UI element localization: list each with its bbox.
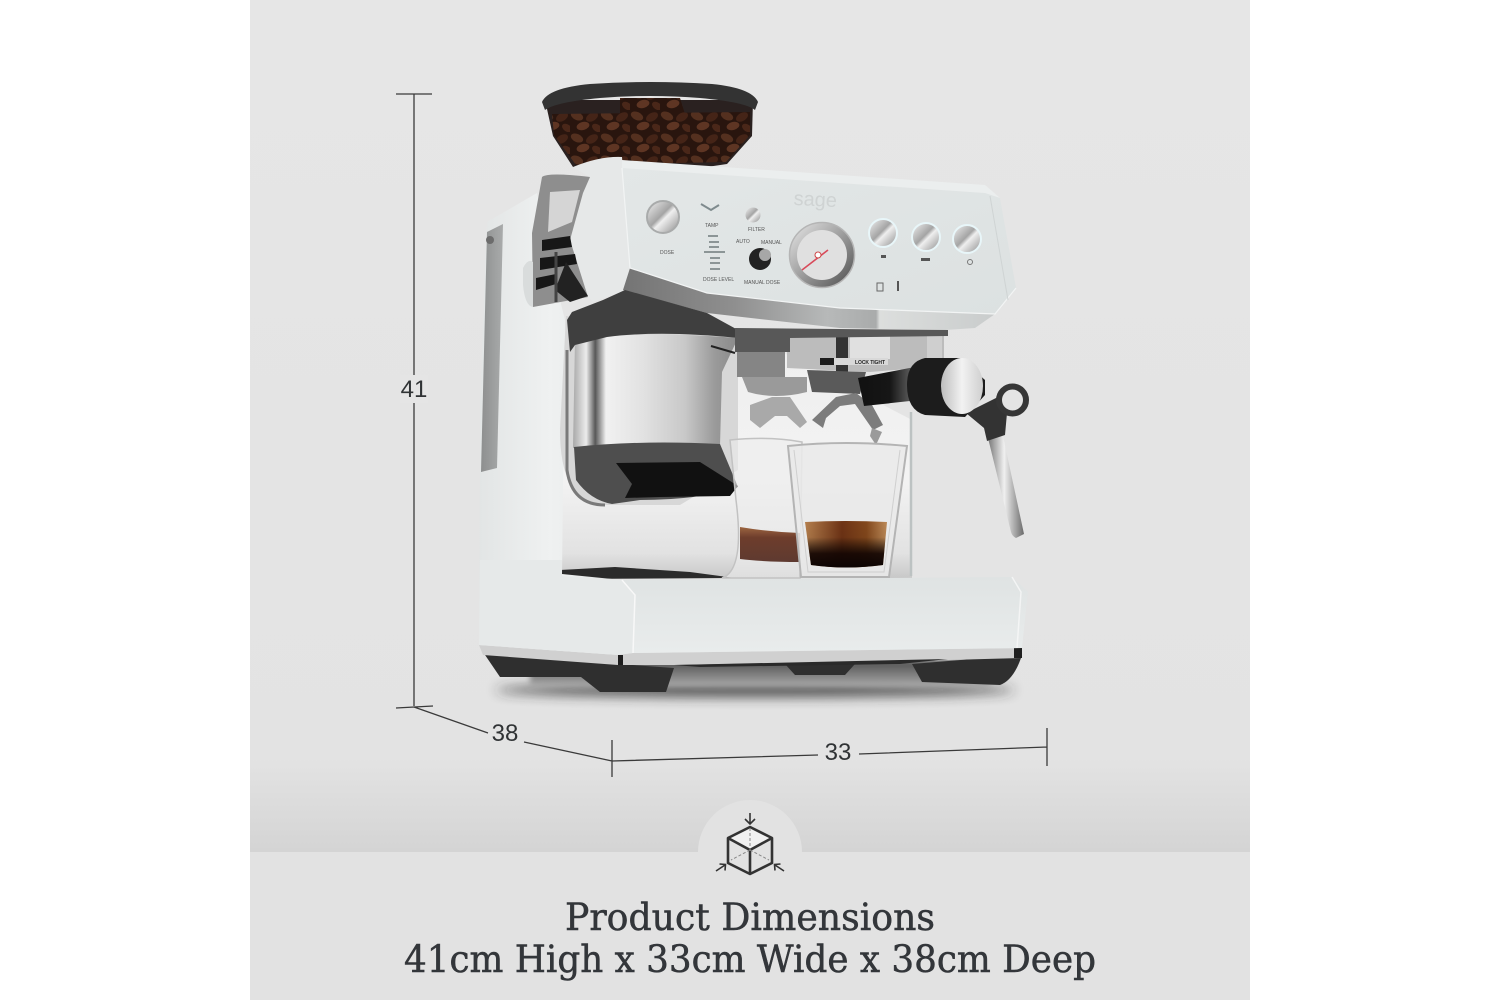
panel labels: TAMP [705,223,719,229]
stainless catcher [573,334,738,448]
tamp chevron [701,204,719,210]
pressure gauge [790,222,854,288]
dark under head [567,290,738,352]
panel: caption band [250,852,1250,1000]
illustration: coffee machine [479,82,1028,692]
group head and portafilters [737,335,944,445]
panel labels [660,223,782,286]
panel labels: DOSE LEVEL [703,277,734,283]
base left block [479,560,635,655]
front control panel [622,160,1016,314]
chrome base strip [479,645,1022,665]
dimension: depth 38: 38 [492,720,518,747]
machine tower side [479,193,622,655]
chrome grinder outlet [523,174,590,307]
steam wand [858,358,1026,538]
text: dimensions summary: 41cm High x 33cm Wide x 38cm Deep [404,938,1096,981]
panel labels: DOSE [660,250,675,256]
panel labels: MANUAL [761,240,782,246]
dial: manual dose [749,248,771,270]
knob: two cups [912,223,940,251]
machine shadow [495,683,1015,697]
icon: dimensions cube [698,800,802,874]
panel labels: MANUAL DOSE [744,280,781,286]
dimension: depth 38 [414,707,612,777]
catcher dark base [574,443,738,504]
dimension: height 41 [396,94,433,708]
feet [483,652,1022,692]
drip tray glass: right [788,443,907,577]
dimension: width 33: 33 [825,739,851,766]
chrome back splash [558,330,912,578]
knob: dose [647,201,679,233]
dimension: width 33 [612,728,1047,766]
knob: power [953,225,981,253]
panel labels: AUTO [736,239,750,245]
dose level indicator [704,236,725,269]
hopper [542,82,758,168]
panel labels: FILTER [748,227,765,233]
under-machine gap [530,660,990,686]
side water window [481,224,503,472]
knob: one cup [869,219,897,247]
drip tray [622,577,1028,653]
lower head band [623,268,995,330]
machine head shoulder [570,157,630,302]
brand mark: sage [793,188,838,212]
heading: product dimensions: Product Dimensions [565,896,935,939]
bean catcher frame [560,316,738,505]
drip tray glass: left [722,438,802,578]
knob: filter [746,208,760,222]
status icons [877,255,972,291]
dimension: height 41: 41 [401,376,427,403]
panel: grey backdrop [250,0,1250,852]
group head label: LOCK TIGHT [855,360,885,366]
